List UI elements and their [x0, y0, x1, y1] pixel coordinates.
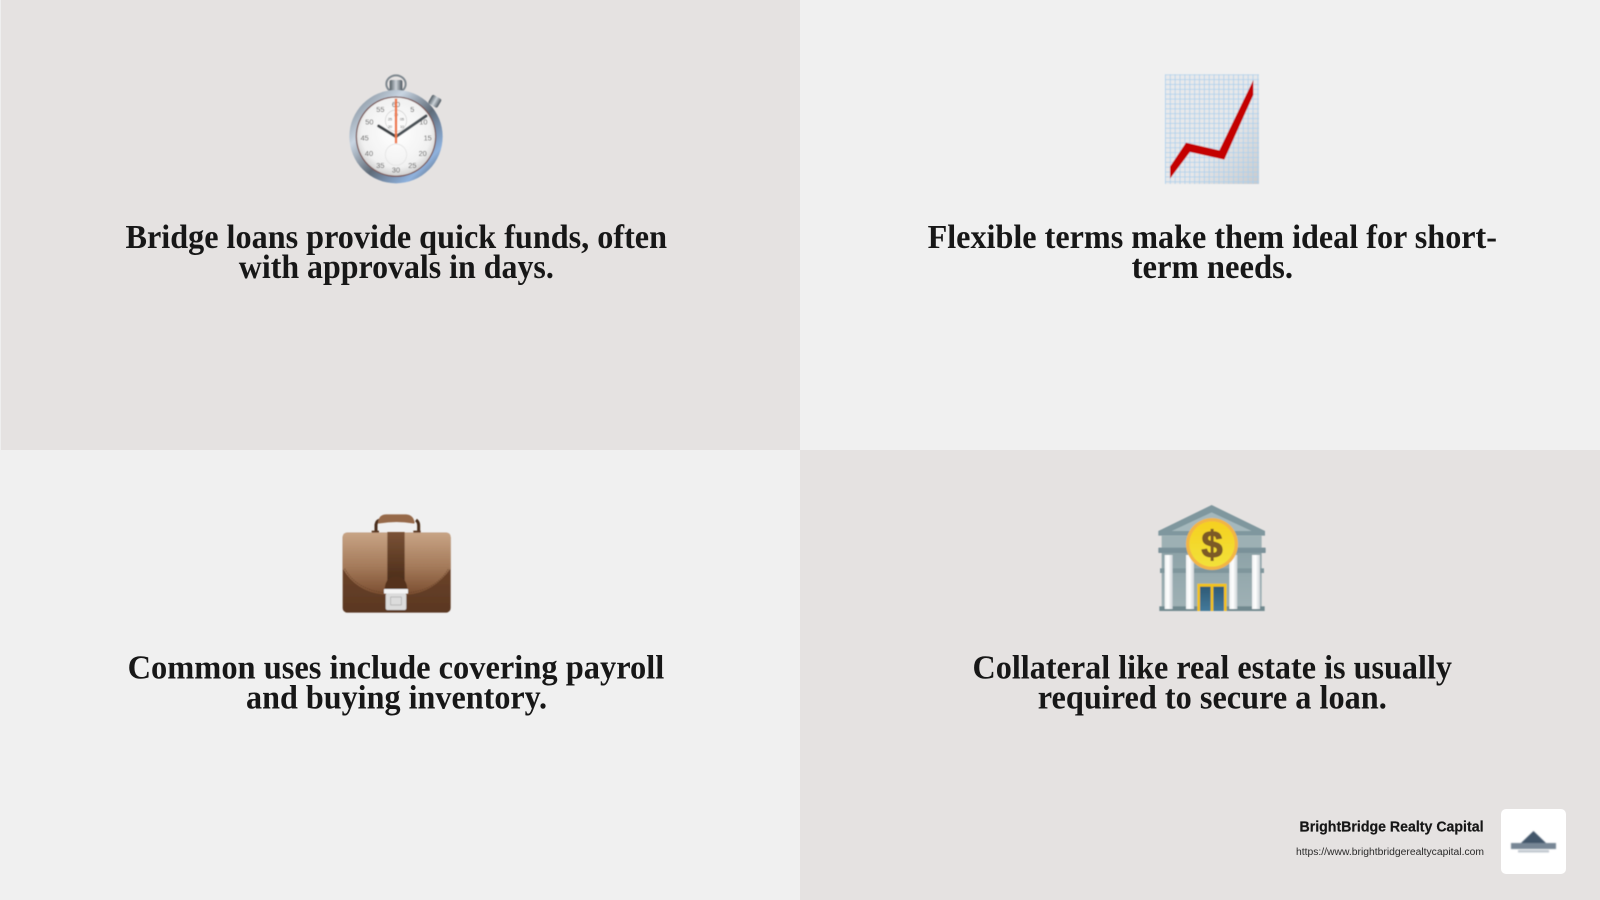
heading: common uses	[128, 650, 664, 716]
left edge sliver	[0, 0, 1, 450]
heading: flexible terms: term needs.	[1132, 249, 1293, 286]
panel: quick funds	[0, 0, 800, 450]
heading: common uses: Common uses include covering payroll	[128, 650, 664, 686]
panel: common uses	[0, 450, 800, 900]
icon: stopwatch: 10	[419, 117, 427, 126]
icon: bank with dollar coin	[1158, 505, 1266, 611]
icon: stopwatch: 05	[400, 118, 404, 122]
icon: stopwatch: 45	[361, 133, 369, 142]
footer brand name: BrightBridge Realty Capital	[1300, 820, 1484, 836]
icon: rising chart	[1165, 74, 1259, 184]
icon: stopwatch: 15	[424, 133, 432, 142]
heading: collateral: Collateral like real estate is usually	[972, 650, 1452, 686]
heading: collateral: required to secure a loan.	[1038, 680, 1387, 716]
heading: common uses: and buying inventory.	[246, 680, 547, 716]
icon: stopwatch: 55	[376, 105, 384, 114]
icon: stopwatch: 35	[376, 161, 384, 170]
icon: stopwatch: 30	[392, 166, 400, 175]
panel: collateral	[800, 450, 1600, 900]
panel: flexible terms	[800, 0, 1600, 450]
heading: flexible terms	[928, 219, 1497, 286]
heading: quick funds: with approvals in days.	[239, 249, 554, 286]
icon: stopwatch: 25	[408, 161, 416, 170]
icon: stopwatch: 40	[365, 149, 373, 158]
heading: flexible terms: Flexible terms make them ideal for short-	[928, 219, 1497, 256]
logo card	[1501, 809, 1566, 874]
heading: quick funds	[126, 219, 667, 286]
icon: stopwatch	[349, 75, 443, 183]
icon: stopwatch: 10	[400, 125, 404, 129]
icon: bank with dollar coin: $	[1201, 524, 1223, 567]
icon: stopwatch: 50	[365, 117, 373, 126]
icon: stopwatch: 60	[392, 100, 400, 109]
footer URL: https://www.brightbridgerealtycapital.com	[1296, 847, 1484, 858]
icon: stopwatch: 30	[394, 113, 398, 117]
icon: stopwatch: 20	[419, 149, 427, 158]
heading: collateral	[972, 650, 1452, 716]
icon: stopwatch: 20	[388, 125, 392, 129]
icon: stopwatch: 25	[388, 118, 392, 122]
icon: briefcase	[343, 514, 451, 613]
heading: quick funds: Bridge loans provide quick funds, often	[126, 219, 667, 256]
icon: stopwatch: 5	[410, 105, 414, 114]
